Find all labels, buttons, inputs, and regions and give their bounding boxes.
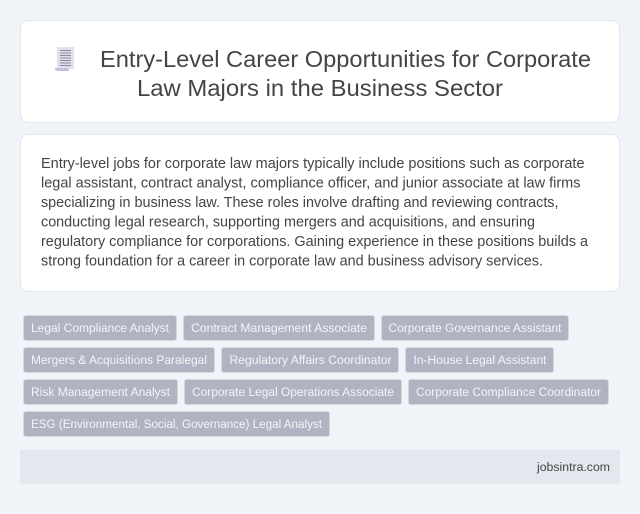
title: Law Majors in the Business Sector (137, 75, 503, 101)
tag (24, 316, 176, 340)
tag (24, 348, 214, 372)
tag: ESG (Environmental, Social, Governance) Legal Analyst (31, 417, 323, 431)
tag (184, 316, 374, 340)
tag (24, 380, 178, 404)
tag: Risk Management Analyst (31, 385, 171, 399)
tag (24, 412, 330, 436)
description text: specializing in business law. These roles involve drafting and reviewing contracts, (41, 195, 558, 211)
tag: Corporate Legal Operations Associate (192, 385, 394, 399)
tag: Contract Management Associate (191, 321, 367, 335)
tag: Regulatory Affairs Coordinator (230, 353, 392, 367)
description text: Entry-level jobs for corporate law majors typically include positions such as corporate (41, 156, 584, 172)
tag: Mergers & Acquisitions Paralegal (31, 353, 207, 367)
panel: title card (20, 20, 620, 122)
description text (41, 156, 589, 270)
job tags (24, 316, 608, 436)
description text: strong foundation for a career in corporate law and business advisory services. (41, 254, 543, 270)
tag (406, 348, 554, 372)
panel: description (20, 134, 620, 292)
tag (408, 380, 608, 404)
footer (20, 450, 620, 484)
description text: regulatory compliance for corporations. Gaining experience in these positions builds a (41, 234, 589, 250)
footer source: jobsintra.com (536, 460, 610, 474)
icon: document scroll (55, 47, 74, 71)
tag: Corporate Compliance Coordinator (416, 385, 601, 399)
tag: Corporate Governance Assistant (388, 321, 562, 335)
tag (222, 348, 398, 372)
description text: conducting legal research, supporting mergers and acquisitions, and ensuring (41, 214, 535, 230)
tag: Legal Compliance Analyst (31, 321, 170, 335)
title (100, 46, 591, 101)
tag: In-House Legal Assistant (414, 353, 547, 367)
title: Entry-Level Career Opportunities for Corporate (100, 46, 591, 72)
tag (184, 380, 402, 404)
tag (382, 316, 568, 340)
description text: legal assistant, contract analyst, compliance officer, and junior associate at law firms (41, 176, 580, 192)
